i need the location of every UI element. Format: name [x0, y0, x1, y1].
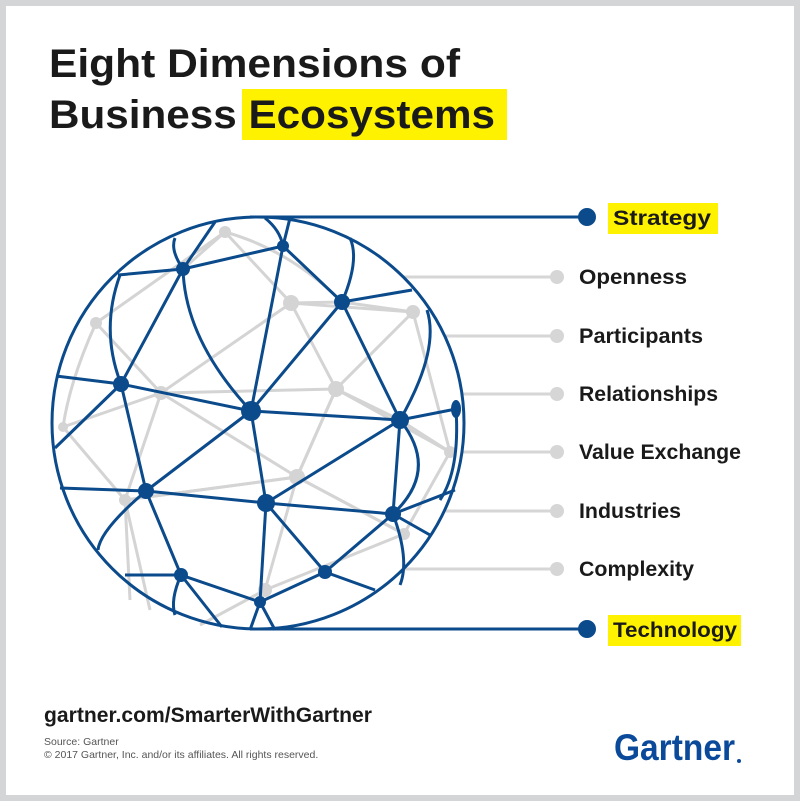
labels: Value Exchange	[579, 441, 741, 464]
labels: Complexity	[579, 558, 694, 581]
source	[44, 736, 318, 761]
labels: Openness	[579, 266, 687, 289]
logo: Gartner	[614, 727, 735, 768]
gray connector lines	[403, 270, 564, 576]
source: Source: Gartner	[44, 736, 119, 748]
blue connector: technology	[250, 620, 596, 638]
footer url: gartner.com/SmarterWithGartner	[44, 704, 372, 727]
title: Eight Dimensions of	[49, 42, 461, 86]
title: Business Ecosystems	[49, 93, 495, 137]
title	[49, 42, 507, 140]
labels: Strategy	[613, 207, 711, 230]
labels: Technology	[613, 619, 737, 642]
labels	[579, 203, 741, 646]
globe	[52, 217, 464, 630]
source: © 2017 Gartner, Inc. and/or its affiliates. All rights reserved.	[44, 749, 318, 761]
labels: Industries	[579, 500, 681, 523]
labels: Participants	[579, 325, 703, 348]
blue connector: strategy	[250, 208, 596, 226]
labels: Relationships	[579, 383, 718, 406]
